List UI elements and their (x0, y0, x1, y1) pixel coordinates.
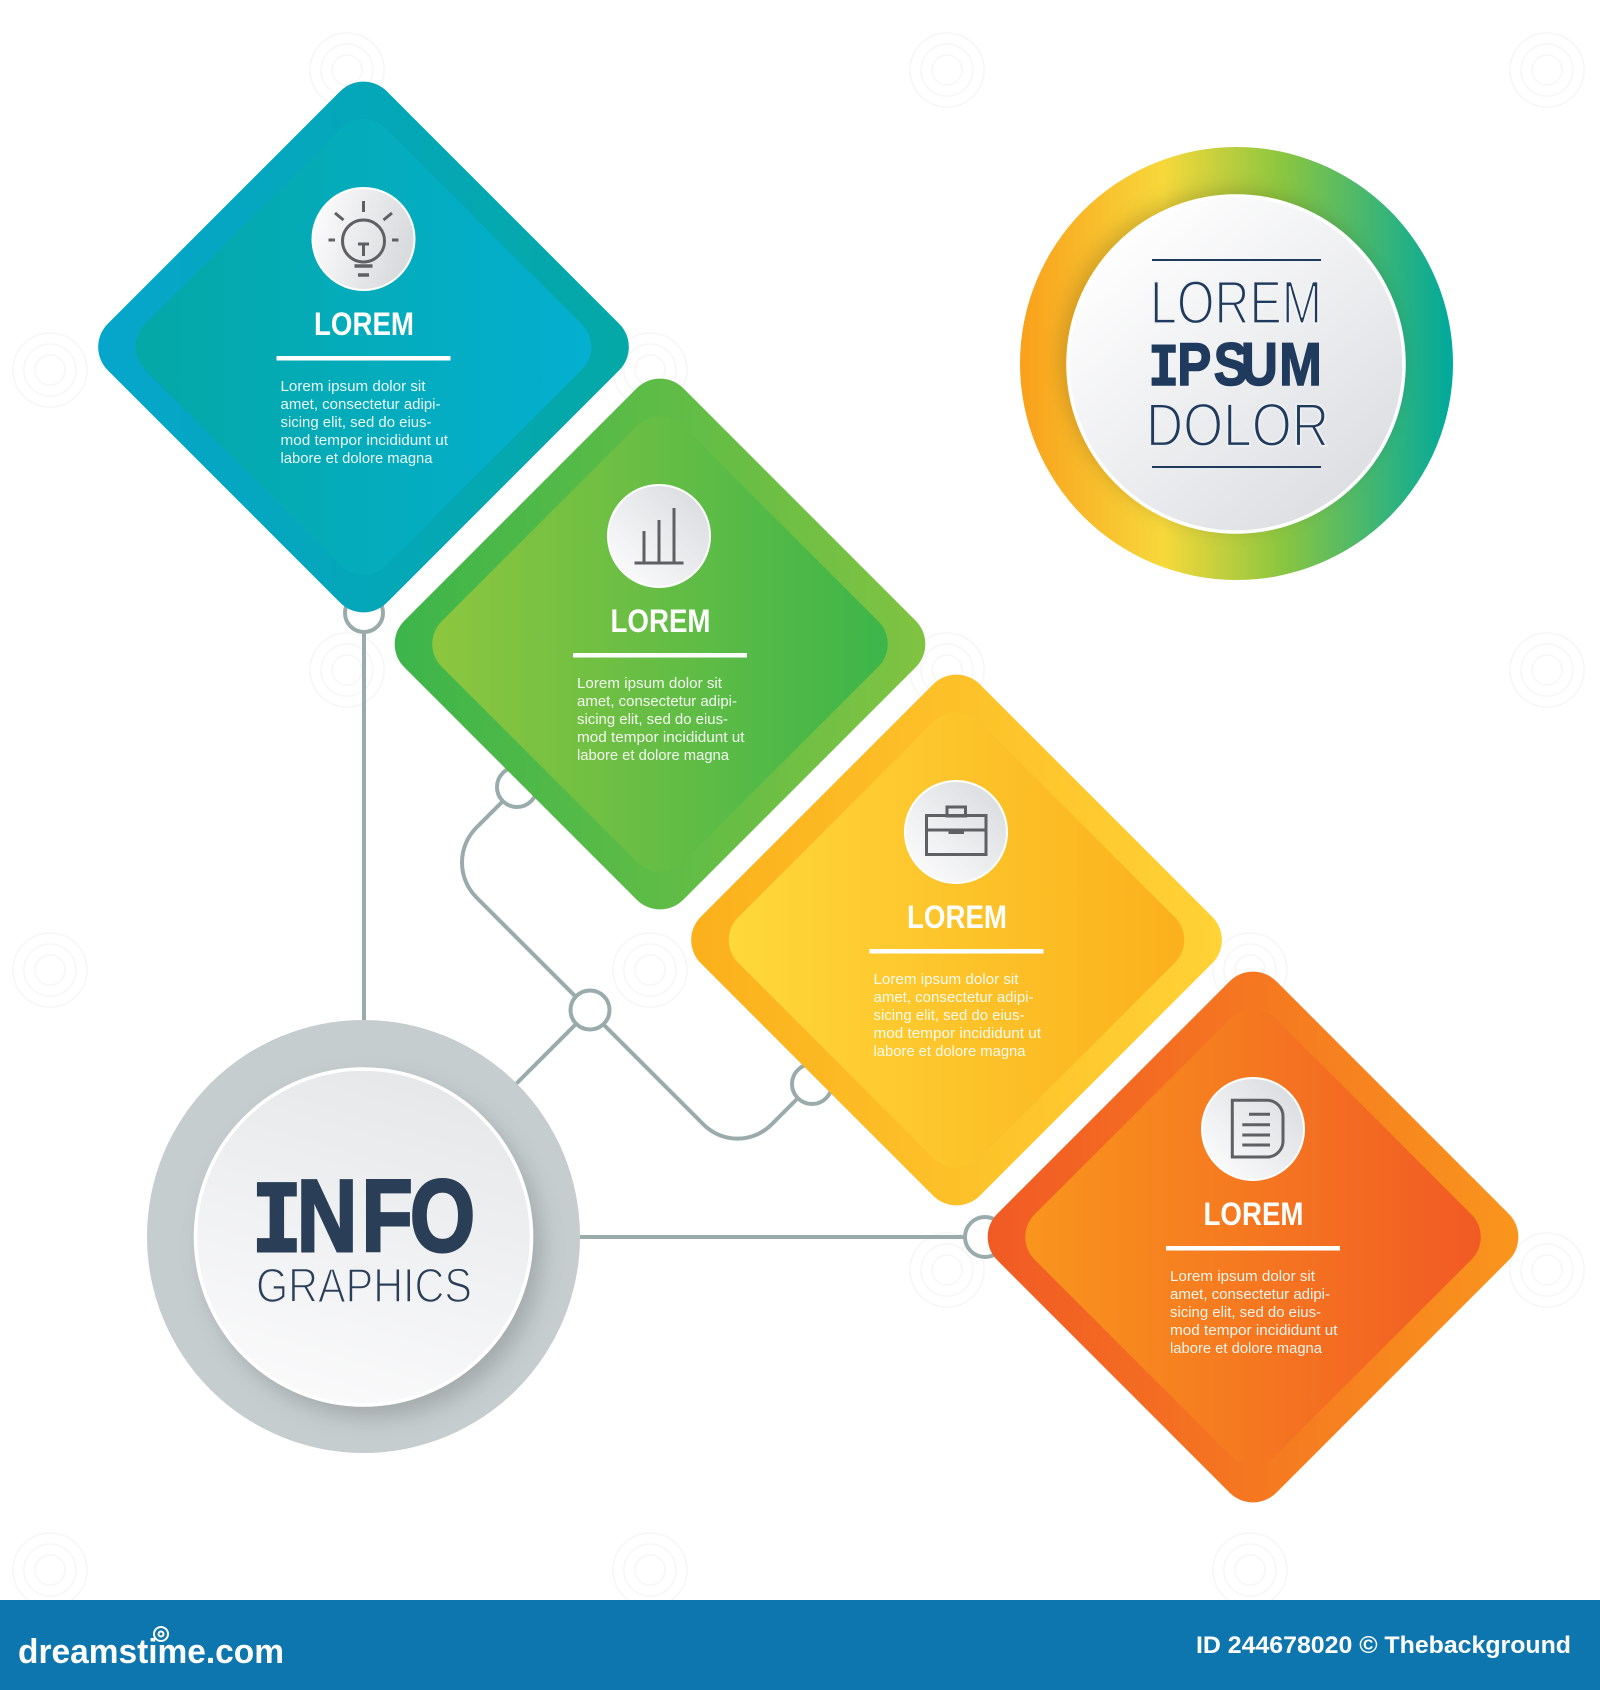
connector: orange card to info circle (575, 1217, 1005, 1257)
body text: Lorem ipsum dolor sit (577, 676, 722, 692)
body text: amet, consectetur adipi- (280, 397, 441, 413)
icon: light bulb (312, 188, 414, 290)
underline (573, 653, 747, 658)
connector: node to info circle (516, 990, 610, 1084)
panel: lorem ipsum dolor badge (1020, 147, 1453, 580)
rule: top (1152, 259, 1321, 261)
body text (280, 379, 448, 467)
panel: orange card (988, 972, 1518, 1502)
panel: blue card (98, 82, 629, 612)
image credit: ID 244678020 © Thebackground (1196, 1632, 1571, 1659)
body text: Lorem ipsum dolor sit (1170, 1269, 1315, 1285)
heading: LOREM (314, 306, 414, 342)
body text: sicing elit, sed do eius- (577, 712, 728, 728)
icon: spiral (154, 1627, 168, 1641)
body text: sicing elit, sed do eius- (280, 415, 432, 431)
title line: LOREM: LOREM (1150, 268, 1322, 336)
underline (276, 356, 450, 360)
body text: sicing elit, sed do eius- (874, 1008, 1025, 1024)
icon: document (1202, 1078, 1304, 1180)
body text: Lorem ipsum dolor sit (874, 972, 1018, 988)
body text: labore et dolore magna (577, 748, 730, 764)
body text: sicing elit, sed do eius- (1170, 1305, 1321, 1321)
brand name: dreamstime.com (18, 1633, 284, 1671)
body text (577, 676, 744, 764)
heading: LOREM (907, 899, 1007, 935)
body text: labore et dolore magna (874, 1044, 1026, 1060)
panel: yellow card (691, 675, 1222, 1205)
underline (870, 949, 1044, 954)
body text (874, 972, 1041, 1060)
heading: LOREM (610, 603, 710, 639)
body text: Lorem ipsum dolor sit (280, 379, 426, 395)
body text: amet, consectetur adipi- (1170, 1287, 1330, 1303)
icon: briefcase (905, 781, 1007, 883)
heading: LOREM (1204, 1196, 1304, 1232)
body text: mod tempor incididunt ut (874, 1026, 1041, 1042)
title: INFO: INFO (252, 1159, 475, 1283)
body text: amet, consectetur adipi- (874, 990, 1034, 1006)
icon: bar chart (608, 485, 710, 587)
title line: IPSUM: IPSUM (1148, 331, 1322, 403)
rule: bottom (1152, 466, 1321, 468)
body text: amet, consectetur adipi- (577, 694, 737, 710)
body text (1170, 1269, 1338, 1357)
body text: labore et dolore magna (1170, 1341, 1323, 1357)
body text: mod tempor incididunt ut (280, 433, 448, 449)
connector: blue card to info circle (345, 594, 383, 1022)
footer banner (0, 1600, 1600, 1690)
connector: green and yellow cards to node (462, 767, 832, 1139)
underline (1166, 1246, 1340, 1250)
panel: green card (395, 379, 925, 909)
body text: labore et dolore magna (280, 451, 433, 467)
body text: mod tempor incididunt ut (1170, 1323, 1338, 1339)
title line: DOLOR: DOLOR (1146, 391, 1329, 459)
body text: mod tempor incididunt ut (577, 730, 744, 746)
connector lines (345, 594, 1005, 1257)
panel: info graphics circle (147, 1020, 580, 1453)
title: GRAPHICS: GRAPHICS (256, 1259, 472, 1313)
